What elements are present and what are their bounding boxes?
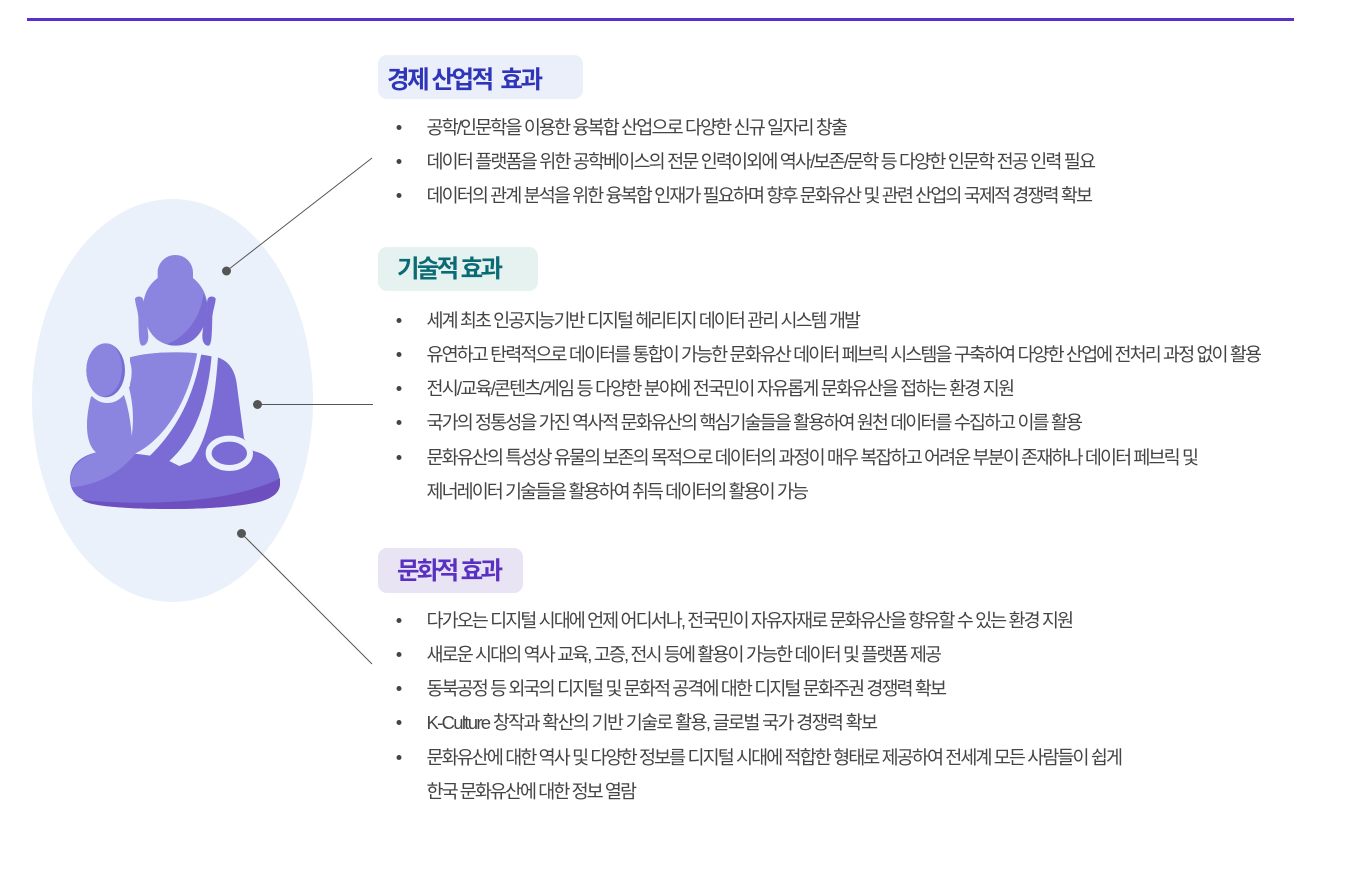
list: economic bullets: 데이터 플랫폼을 위한 공학베이스의 전문 인력이외에 역사/보존/문학 등 다양한 인문학 전공 인력 필요 [426, 151, 1096, 172]
panel: technical effects [378, 247, 1262, 502]
list: technical bullets: 유연하고 탄력적으로 데이터를 통합이 가능한 문화유산 데이터 페브릭 시스템을 구축하여 다양한 산업에 전처리 과정 없이 활용 [426, 344, 1262, 365]
list: cultural bullets: K-Culture 창작과 확산의 기반 기술로 활용, 글로벌 국가 경쟁력 확보 [426, 712, 878, 733]
list: technical bullets: 세계 최초 인공지능기반 디지털 헤리티지 데이터 관리 시스템 개발 [426, 310, 861, 331]
panel: economic and industrial effects [378, 55, 1096, 206]
list: economic bullets: 데이터의 관계 분석을 위한 융복합 인재가 필요하며 향후 문화유산 및 관련 산업의 국제적 경쟁력 확보 [426, 185, 1093, 206]
list: economic bullets: 공학/인문학을 이용한 융복합 산업으로 다양한 신규 일자리 창출 [426, 117, 848, 138]
list: cultural bullets: 문화유산에 대한 역사 및 다양한 정보를 디지털 시대에 적합한 형태로 제공하여 전세계 모든 사람들이 쉽게 [426, 747, 1123, 768]
heading: economic and industrial effects [378, 55, 583, 99]
panel: cultural effects [378, 548, 1123, 802]
connector: economic effect [222, 158, 372, 276]
list: cultural bullets: 다가오는 디지털 시대에 언제 어디서나, 전국민이 자유자재로 문화유산을 향유할 수 있는 환경 지원 [426, 610, 1074, 631]
list: cultural bullets: 동북공정 등 외국의 디지털 및 문화적 공격에 대한 디지털 문화주권 경쟁력 확보 [426, 678, 947, 699]
icon: Buddha left hand [86, 343, 132, 403]
heading: technical effects: 기술적 효과 [397, 255, 503, 283]
icon: Buddha head [135, 255, 216, 346]
icon: Buddha right hand [209, 439, 250, 468]
list: cultural bullets [396, 610, 1123, 802]
list: technical bullets: 전시/교육/콘텐츠/게임 등 다양한 분야에 전국민이 자유롭게 문화유산을 접하는 환경 지원 [426, 378, 1015, 399]
list: technical bullets: 제너레이터 기술들을 활용하여 취득 데이터의 활용이 가능 [426, 481, 809, 502]
icon: Buddha body [70, 352, 280, 509]
illustration: seated Buddha in oval [32, 199, 313, 602]
list: technical bullets: 문화유산의 특성상 유물의 보존의 목적으로 데이터의 과정이 매우 복잡하고 어려운 부분이 존재하나 데이터 페브릭 및 [426, 447, 1199, 468]
heading: economic and industrial effects: 경제 산업적 효과 [387, 66, 543, 94]
heading: cultural effects [378, 548, 523, 593]
connector: cultural effect [237, 529, 372, 664]
list: cultural bullets: 한국 문화유산에 대한 정보 열람 [426, 781, 637, 802]
list: cultural bullets: 새로운 시대의 역사 교육, 고증, 전시 등에 활용이 가능한 데이터 및 플랫폼 제공 [426, 644, 942, 665]
list: technical bullets: 국가의 정통성을 가진 역사적 문화유산의 핵심기술들을 활용하여 원천 데이터를 수집하고 이를 활용 [426, 412, 1083, 433]
connector: technical effect [253, 400, 373, 409]
list: technical bullets [396, 310, 1262, 502]
list: economic bullets [396, 117, 1096, 206]
heading: cultural effects: 문화적 효과 [397, 557, 503, 585]
heading: technical effects [378, 247, 538, 291]
